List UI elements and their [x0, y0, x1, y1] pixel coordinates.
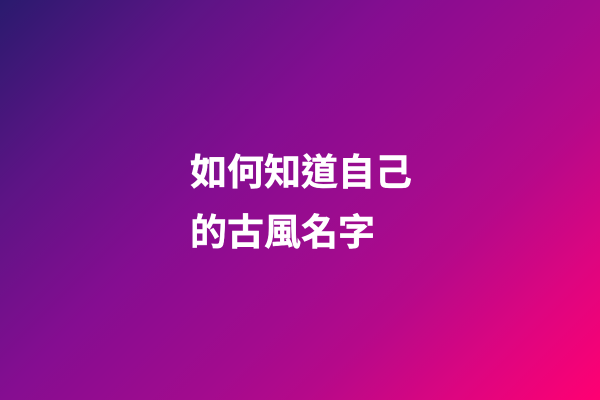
- title: [190, 152, 412, 253]
- title: 的古風名字: [190, 212, 375, 253]
- title: 如何知道自己: [190, 152, 412, 193]
